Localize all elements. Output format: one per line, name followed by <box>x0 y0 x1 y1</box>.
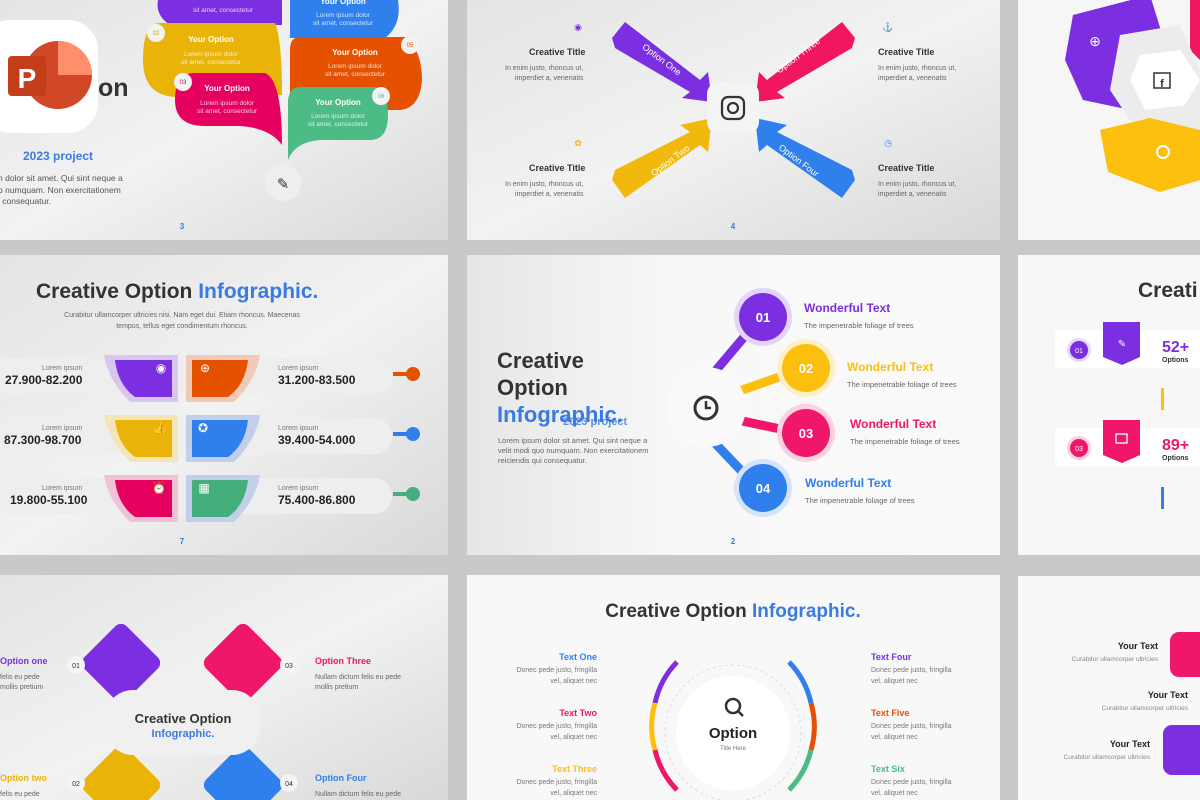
panel: slide 4 top-middle arrows: 4 <box>731 222 736 231</box>
panel: slide 4 top-middle arrows: In enim justo, rhoncus ut, <box>878 181 956 188</box>
panel: slide bottom-middle circle: vel, aliquet nec <box>871 790 918 797</box>
panel: slide bottom-left diamonds: Option two <box>0 773 47 783</box>
panel: slide 3 top-left: Lorem ipsum dolor <box>200 100 255 107</box>
panel: slide top-right hexagons: f <box>1160 78 1164 90</box>
panel: slide bottom-middle circle: Donec pede justo, fringilla <box>516 723 597 730</box>
panel: slide 2 center: The impenetrable foliage of trees <box>804 321 914 330</box>
panel: slide 3 top-left: Your Option <box>315 98 361 107</box>
panel: slide bottom-right: Curabitur ullamcorper ultricies <box>1102 705 1189 712</box>
panel: slide 3 top-left: sit amet, consectetur <box>308 121 369 128</box>
center circle: Option <box>709 725 757 742</box>
panel: slide bottom-middle circle: Creative Option Infographic. <box>605 601 861 622</box>
panel: slide bottom-left diamonds: felis eu pede <box>0 674 40 681</box>
panel: slide 4 top-middle arrows: Creative Title <box>529 47 585 57</box>
heading: Creative Option Infographic. <box>36 280 318 303</box>
panel: slide bottom-left diamonds: Option one <box>0 656 48 666</box>
arrow: option four <box>755 118 855 198</box>
row 2 <box>104 415 260 462</box>
panel: slide bottom-left diamonds: mollis pretium <box>315 684 358 691</box>
panel: slide 7 mid-left: ▦ <box>198 481 210 495</box>
heading: Creative <box>497 348 584 373</box>
panel: slide 4 top-middle arrows: imperdiet a, venenatis <box>515 75 584 82</box>
panel: slide 3 top-left: 05 <box>407 43 414 49</box>
heading <box>497 348 623 427</box>
panel: slide 7 mid-left <box>0 255 448 555</box>
panel: slide 2 center: velit modi quo numquam. Non exercitationem <box>498 446 648 455</box>
panel: slide 3 top-left: sit amet, consectetur <box>197 108 258 115</box>
panel: slide 2 center: The impenetrable foliage of trees <box>847 380 957 389</box>
panel: slide mid-right stats: 52+ <box>1162 339 1189 356</box>
panel: slide bottom-left diamonds: 04 <box>285 781 293 788</box>
panel: slide mid-right stats: Creati <box>1138 279 1198 302</box>
panel: slide 3 top-left: Lorem ipsum dolor <box>316 12 371 19</box>
panel: slide 7 mid-left: ✪ <box>198 421 208 435</box>
panel: slide bottom-left diamonds: 01 <box>72 663 80 670</box>
panel: slide 7 mid-left: 👍 <box>153 421 167 435</box>
panel: slide 7 mid-left: Lorem ipsum <box>42 365 83 372</box>
node 01 <box>734 288 792 346</box>
panel: slide 4 top-middle arrows: imperdiet a, venenatis <box>515 191 584 198</box>
panel: slide bottom-middle circle: Text One <box>559 652 597 662</box>
panel: slide mid-right stats: 89+ <box>1162 437 1189 454</box>
center circle <box>676 676 790 790</box>
panel: slide 7 mid-left: 27.900-82.200 <box>5 373 83 387</box>
bubble pink <box>175 73 282 145</box>
panel: slide mid-right stats: 01 <box>1075 348 1083 355</box>
panel: slide bottom-middle circle: vel, aliquet nec <box>550 790 597 797</box>
panel: slide 7 mid-left: 19.800-55.100 <box>10 493 88 507</box>
connectors <box>712 330 785 480</box>
panel: slide 3 top-left: sit amet, consectetur <box>181 59 242 66</box>
panel: slide bottom-left diamonds: Option Four <box>315 773 367 783</box>
row 3 <box>104 475 260 522</box>
panel: slide 3 top-left: sit amet, consectetur <box>325 71 386 78</box>
panel: slide bottom-right: Curabitur ullamcorper ultricies <box>1072 656 1159 663</box>
panel: slide 4 top-middle arrows: ✿ <box>574 138 582 148</box>
arrow: option two <box>612 118 712 198</box>
center icon <box>666 367 746 447</box>
panel: slide 7 mid-left: Lorem ipsum <box>42 485 83 492</box>
panel: slide 4 top-middle arrows: ◷ <box>884 138 892 148</box>
panel: slide bottom-middle circle: Text Four <box>871 652 912 662</box>
bubble green <box>288 87 388 160</box>
arrow: option four: Option Four <box>777 142 821 179</box>
body text: o numquam. Non exercitationem <box>0 185 121 195</box>
center label <box>105 690 260 755</box>
panel: slide bottom-middle circle <box>467 575 1000 800</box>
panel: slide 7 mid-left: 87.300-98.700 <box>4 433 82 447</box>
panel: slide bottom-left diamonds: Nullam dictum felis eu pede <box>315 674 401 681</box>
panel: slide 4 top-middle arrows: Creative Title <box>878 47 934 57</box>
bubble purple <box>158 0 282 25</box>
panel: slide 3 top-left: 03 <box>180 80 187 86</box>
panel: slide 7 mid-left: 31.200-83.500 <box>278 373 356 387</box>
panel: slide bottom-right <box>1018 576 1200 800</box>
node 03 <box>777 404 835 462</box>
panel: slide 7 mid-left: Lorem ipsum <box>278 485 319 492</box>
panel: slide 7 mid-left: Lorem ipsum <box>42 425 83 432</box>
title fragment: on <box>98 74 129 102</box>
panel: slide 2 center: The impenetrable foliage of trees <box>805 496 915 505</box>
panel: slide 4 top-middle arrows: imperdiet a, venenatis <box>878 191 947 198</box>
panel: slide 4 top-middle arrows: In enim justo, rhoncus ut, <box>505 65 583 72</box>
panel: slide 2 center: Wonderful Text <box>804 301 890 315</box>
panel: slide bottom-right: Curabitur ullamcorper ultricies <box>1064 754 1151 761</box>
panel: slide 3 top-left: Your Option <box>332 48 378 57</box>
arrow: option one <box>612 22 712 102</box>
panel: slide 2 center: Wonderful Text <box>847 360 933 374</box>
node 04 <box>734 459 792 517</box>
panel: slide 4 top-middle arrows: imperdiet a, venenatis <box>878 75 947 82</box>
bubble orange <box>290 37 422 110</box>
icon: powerpoint logo <box>0 20 98 133</box>
panel: slide 3 top-left: sit amet, consectetur <box>193 7 254 14</box>
panel: slide 3 top-left: Your Option <box>204 84 250 93</box>
node 02 <box>777 339 835 397</box>
center circle: Title Here <box>720 746 747 752</box>
heading: Infographic. <box>497 402 623 427</box>
panel: slide bottom-right: Your Text <box>1118 641 1158 651</box>
panel: slide bottom-middle circle: vel, aliquet nec <box>871 734 918 741</box>
panel: slide bottom-middle circle: Text Five <box>871 708 909 718</box>
panel: slide 2 center: Lorem ipsum dolor sit amet. Qui sint neque a <box>498 436 648 445</box>
arrow: option three: Option Three <box>774 36 822 75</box>
panel: slide mid-right stats: ✎ <box>1118 339 1126 350</box>
panel: slide bottom-middle circle: vel, aliquet nec <box>550 678 597 685</box>
panel: slide bottom-left diamonds: Option Three <box>315 656 371 666</box>
panel: slide bottom-middle circle: Text Three <box>552 764 597 774</box>
panel: slide 3 top-left: sit amet, consectetur <box>313 20 374 27</box>
panel: slide 4 top-middle arrows <box>467 0 1000 240</box>
icon: pencil: ✎ <box>277 176 289 193</box>
node 03: 03 <box>799 426 813 441</box>
panel: slide 3 top-left: 3 <box>180 222 185 231</box>
bubble yellow <box>143 23 282 97</box>
panel: slide 2 center: reiciendis qui consequatur. <box>498 456 587 465</box>
panel: slide bottom-left diamonds: Nullam dictum felis eu pede <box>315 791 401 798</box>
panel: slide 7 mid-left: 75.400-86.800 <box>278 493 356 507</box>
panel: slide bottom-middle circle: vel, aliquet nec <box>871 678 918 685</box>
panel: slide 7 mid-left: Curabitur ullamcorper ultricies nisi. Nam eget dui. Etiam rhoncus. Maecenas <box>64 312 300 319</box>
panel: slide 7 mid-left: ⊕ <box>200 361 210 375</box>
center label: Creative Option <box>135 711 231 726</box>
arrow: option two: Option Two <box>649 143 691 178</box>
panel: slide 2 center: The impenetrable foliage of trees <box>850 437 960 446</box>
panel: slide bottom-middle circle: Donec pede justo, fringilla <box>516 779 597 786</box>
icon: powerpoint logo: P <box>18 63 36 94</box>
node 01: 01 <box>756 310 770 325</box>
panel: slide bottom-left diamonds: felis eu pede <box>0 791 40 798</box>
panel: slide 3 top-left <box>0 0 448 240</box>
panel: slide bottom-middle circle: Donec pede justo, fringilla <box>871 779 952 786</box>
panel: slide 4 top-middle arrows: In enim justo, rhoncus ut, <box>878 65 956 72</box>
panel: slide 3 top-left: Your Option <box>188 35 234 44</box>
panel: slide 7 mid-left: ◉ <box>156 361 166 375</box>
panel: slide 3 top-left: Lorem ipsum dolor <box>184 51 239 58</box>
panel: slide bottom-right: Your Text <box>1110 739 1150 749</box>
panel: slide 4 top-middle arrows: Creative Title <box>878 163 934 173</box>
panel: slide 7 mid-left: tempus, tellus eget condimentum rhoncus. <box>116 323 248 330</box>
panel: slide bottom-middle circle: Donec pede justo, fringilla <box>516 667 597 674</box>
panel: slide 2 center <box>467 255 1000 555</box>
body text <box>0 173 123 206</box>
bubble blue <box>290 0 399 38</box>
panel: slide 3 top-left: 06 <box>378 94 385 100</box>
panel: slide 2 center: 2023 project <box>563 416 628 428</box>
panel: slide 3 top-left: Lorem ipsum dolor <box>311 113 366 120</box>
panel: slide bottom-middle circle: vel, aliquet nec <box>550 734 597 741</box>
panel: slide mid-right stats: Options <box>1162 357 1189 364</box>
arrow: option three <box>755 22 855 102</box>
icon: pencil <box>265 165 301 201</box>
panel: slide bottom-middle circle: Donec pede justo, fringilla <box>871 667 952 674</box>
panel: slide 7 mid-left: 7 <box>180 537 185 546</box>
panel: slide 7 mid-left: Lorem ipsum <box>278 425 319 432</box>
panel: slide 4 top-middle arrows: ◉ <box>574 22 582 32</box>
node 02: 02 <box>799 361 813 376</box>
panel: slide 2 center: Wonderful Text <box>805 476 891 490</box>
panel: slide 3 top-left: Lorem ipsum dolor <box>328 63 383 70</box>
panel: slide 4 top-middle arrows: Creative Title <box>529 163 585 173</box>
panel: slide 3 top-left: 02 <box>153 31 160 37</box>
subtitle: 2023 project <box>23 149 93 163</box>
panel: slide 7 mid-left: Lorem ipsum <box>278 365 319 372</box>
arrow: option one: Option One <box>640 42 683 77</box>
icon: instagram <box>707 82 759 134</box>
panel: slide 7 mid-left: ⏰ <box>152 480 166 495</box>
node 04: 04 <box>756 481 771 496</box>
panel: slide bottom-middle circle: Text Two <box>559 708 597 718</box>
panel: slide mid-right stats: 03 <box>1075 446 1083 453</box>
panel: slide 7 mid-left: 39.400-54.000 <box>278 433 356 447</box>
panel: slide mid-right stats: Options <box>1162 455 1189 462</box>
panel: slide top-right hexagons: ⊕ <box>1089 33 1101 49</box>
panel: slide 2 center: Wonderful Text <box>850 417 936 431</box>
body text: n dolor sit amet. Qui sint neque a <box>0 173 123 183</box>
panel: slide bottom-left diamonds: 03 <box>285 663 293 670</box>
panel: slide bottom-left diamonds: mollis pretium <box>0 684 43 691</box>
center label: Infographic. <box>152 728 214 740</box>
panel: slide 2 center: 2 <box>731 537 736 546</box>
panel: slide bottom-left diamonds: 02 <box>72 781 80 788</box>
panel: slide 4 top-middle arrows: In enim justo, rhoncus ut, <box>505 181 583 188</box>
panel: slide mid-right stats <box>1018 255 1200 555</box>
row 1 <box>104 355 260 402</box>
panel: slide bottom-middle circle: Donec pede justo, fringilla <box>871 723 952 730</box>
panel: slide bottom-middle circle: Text Six <box>871 764 905 774</box>
panel: slide bottom-left diamonds <box>0 575 448 800</box>
arcs <box>652 662 814 790</box>
panel: slide 4 top-middle arrows: ⚓ <box>882 21 894 32</box>
panel: slide top-right hexagons <box>1018 0 1200 240</box>
heading: Option <box>497 375 568 400</box>
panel: slide bottom-right: Your Text <box>1148 690 1188 700</box>
